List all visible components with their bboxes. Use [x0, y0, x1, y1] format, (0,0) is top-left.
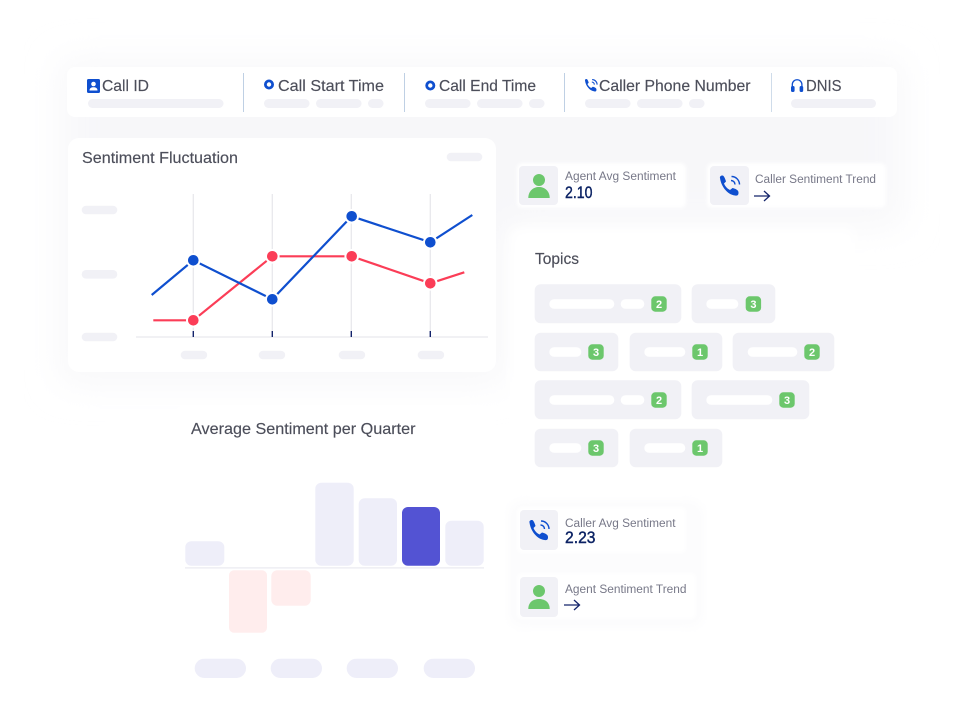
- field: DNIS: DNIS: [806, 78, 842, 95]
- stat: Agent Sentiment Trend: Agent Sentiment Trend: [565, 584, 686, 596]
- topic row 1: 3: [750, 299, 756, 311]
- panel: topics: [510, 228, 855, 493]
- topic row 1: 2: [656, 299, 662, 311]
- field: DNIS: [791, 78, 876, 108]
- stat: Agent Avg Sentiment: Agent Avg Sentiment: [565, 171, 677, 183]
- stat: Agent Avg Sentiment: 2.10: [565, 184, 592, 202]
- stat: Caller Sentiment Trend: Caller Sentiment Trend: [755, 174, 876, 186]
- topic row 2: 2: [809, 347, 815, 359]
- field: Call Start Time: [264, 78, 384, 108]
- field: Call ID: [87, 78, 224, 108]
- heading: Topics: Topics: [535, 251, 579, 268]
- stat: Caller Sentiment Trend: [707, 163, 886, 208]
- panel: average sentiment per quarter: [172, 405, 496, 700]
- stat: Caller Avg Sentiment: Caller Avg Sentiment: [565, 518, 676, 530]
- line chart: [82, 194, 488, 359]
- heading: Average Sentiment per Quarter: Average Sentiment per Quarter: [191, 421, 416, 438]
- field: Call End Time: [425, 78, 544, 108]
- topic row 1: [535, 284, 775, 323]
- field: Caller Phone Number: [585, 78, 751, 108]
- bar chart: [185, 483, 484, 678]
- topic row 2: 3: [593, 347, 599, 359]
- stat: Agent Avg Sentiment: [517, 163, 686, 208]
- topic row 4: 3: [593, 443, 599, 455]
- arrow: [564, 600, 580, 610]
- field: Call Start Time: Call Start Time: [278, 78, 384, 95]
- stat haze: lower stat cards: [508, 500, 704, 628]
- field: Call ID: Call ID: [102, 78, 149, 95]
- series: blue line: [152, 210, 472, 306]
- topic row 4: 1: [697, 443, 703, 455]
- background haze: [62, 62, 902, 382]
- stat: Caller Avg Sentiment: [517, 507, 686, 553]
- topic row 2: [535, 333, 834, 371]
- field: Caller Phone Number: Caller Phone Number: [599, 78, 751, 95]
- topic row 2: 1: [697, 347, 703, 359]
- topic row 3: 2: [656, 395, 662, 407]
- topic row 4: [535, 429, 722, 467]
- arrow: [754, 191, 770, 201]
- heading: Sentiment Fluctuation: Sentiment Fluctuation: [82, 150, 238, 167]
- series: red line: [153, 250, 464, 327]
- field: Call End Time: Call End Time: [439, 78, 536, 95]
- topic row 3: 3: [784, 395, 790, 407]
- panel: call details header: [67, 67, 897, 117]
- stat: Agent Sentiment Trend: [517, 573, 696, 619]
- topic row 3: [535, 380, 809, 419]
- panel: sentiment fluctuation: [68, 138, 496, 372]
- stat: Caller Avg Sentiment: 2.23: [565, 529, 596, 547]
